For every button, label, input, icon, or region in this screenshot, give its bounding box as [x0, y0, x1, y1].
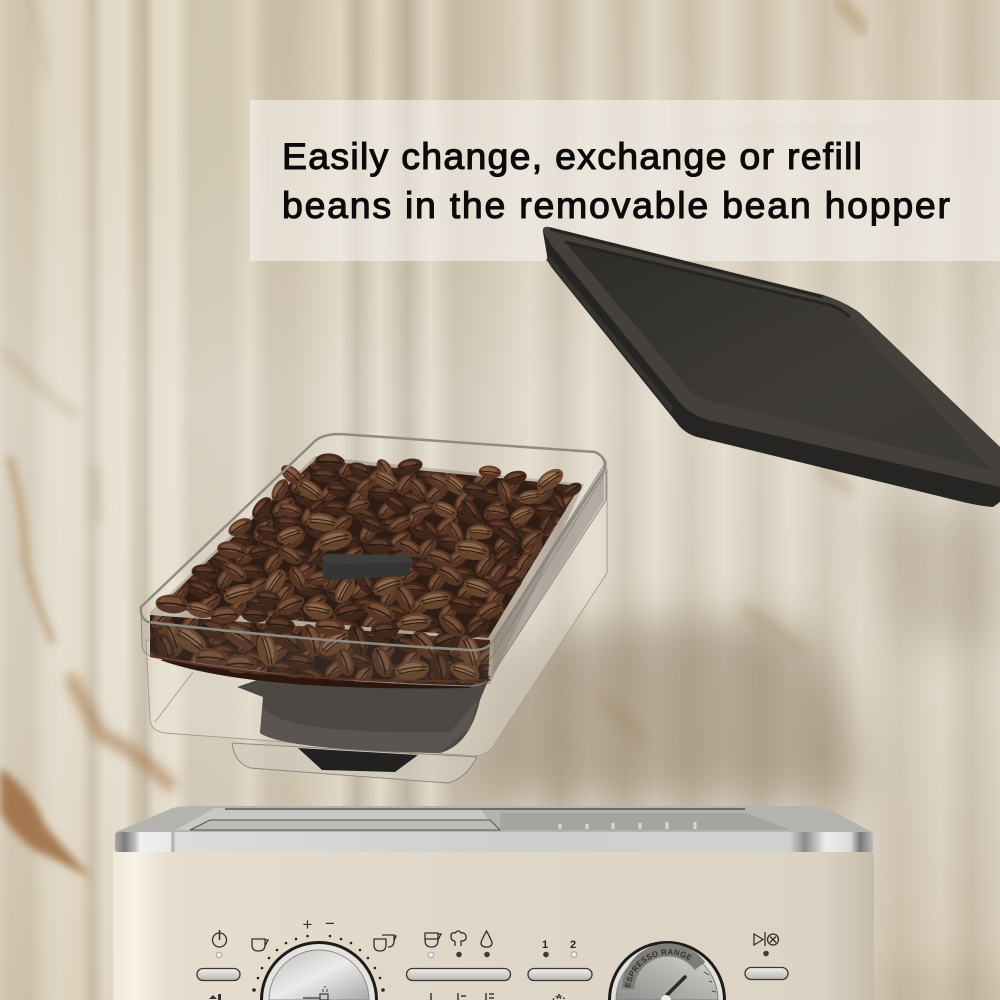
- dial scale dots: [252, 935, 385, 992]
- hopper funnel and base: [237, 665, 490, 753]
- single cup icon: [252, 939, 268, 951]
- temperature icons: [431, 993, 494, 1000]
- machine chrome band: [115, 832, 873, 852]
- espresso range gauge: ESPRESSO RANGE: [624, 949, 692, 988]
- espresso range gauge: [608, 941, 726, 1000]
- hopper centre handle: [322, 554, 412, 580]
- start stop button: [745, 968, 788, 980]
- hopper glass rim: [141, 434, 605, 650]
- heading line 1: Easily change, exchange or refill: [282, 135, 862, 177]
- drink mode icons: [425, 931, 492, 947]
- rotary dial: [260, 941, 378, 1000]
- power button group: [197, 930, 240, 1000]
- control panel: [196, 914, 789, 1000]
- marble veins: [0, 3, 880, 878]
- machine top tray: [116, 806, 872, 832]
- bean hopper: [141, 434, 607, 783]
- start stop LED: [763, 951, 769, 956]
- text banner: [250, 100, 1000, 261]
- drink mode button: [406, 968, 510, 980]
- beans surface: [150, 452, 584, 685]
- plus and minus: −: [325, 914, 335, 933]
- shot number selector: 1: [542, 939, 548, 951]
- hopper lower shell: [146, 470, 607, 756]
- heading line 2: beans in the removable bean hopper: [282, 184, 950, 226]
- double cup icon: [374, 935, 396, 951]
- start stop icon: [754, 932, 778, 946]
- beans seen through front wall: [150, 615, 490, 686]
- plus and minus: +: [303, 915, 313, 934]
- shot number selector: [528, 939, 592, 1000]
- machine body: [113, 852, 874, 1000]
- drink mode LEDs: [428, 952, 490, 958]
- coffee machine: [113, 766, 874, 1000]
- plus and minus: [303, 914, 335, 934]
- shot number selector: 2: [570, 939, 576, 951]
- hopper lid: [543, 227, 1000, 507]
- wall shadow behind hopper and lid: [470, 510, 1000, 1000]
